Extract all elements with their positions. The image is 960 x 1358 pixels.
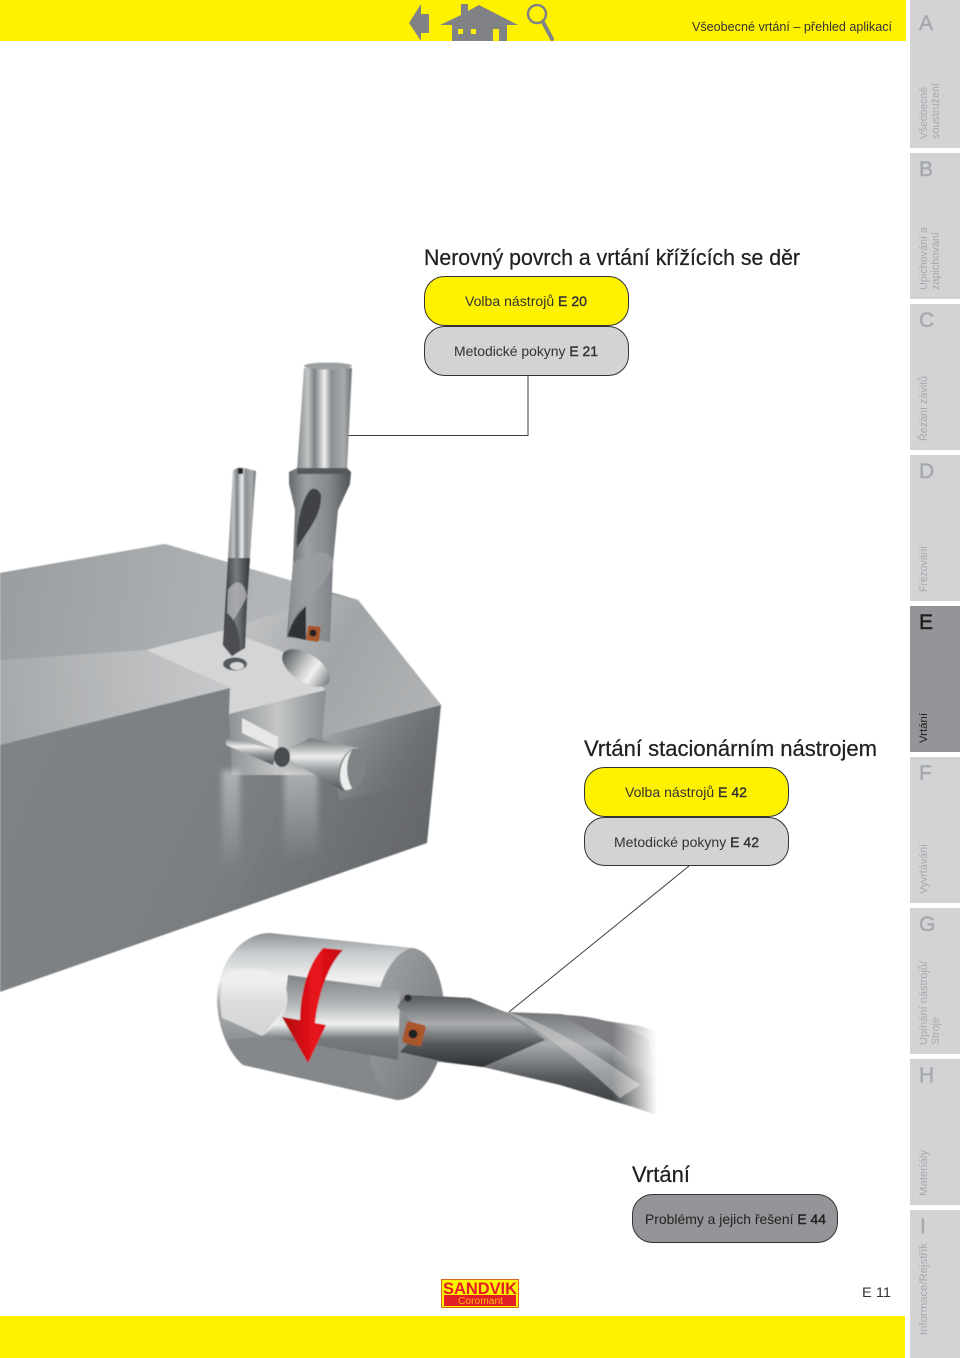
sidebar tabs: zapichování bbox=[930, 232, 942, 290]
cross tube opening bbox=[334, 745, 370, 795]
highlight on cylinder end bbox=[220, 968, 288, 1036]
logo: Sandvik Coromant bbox=[442, 1279, 518, 1308]
end face bbox=[370, 948, 445, 1100]
lighter wedge on top surface bbox=[0, 650, 230, 745]
sidebar tabs: H bbox=[919, 1064, 934, 1087]
section: drilling heading: Vrtání bbox=[632, 1162, 690, 1187]
sidebar tabs: soustružení bbox=[930, 83, 942, 139]
illustration: workpiece block with drills bbox=[0, 544, 441, 992]
sidebar tabs: C bbox=[919, 309, 934, 332]
sidebar tabs: F bbox=[919, 762, 932, 785]
sidebar tabs: D bbox=[919, 460, 934, 483]
insert bbox=[306, 625, 321, 642]
cross tube left part bbox=[226, 737, 277, 765]
sidebar tabs: A bbox=[919, 12, 933, 35]
tool shank bbox=[397, 994, 665, 1118]
lower body shade bbox=[226, 1036, 398, 1100]
connector line to tool bbox=[509, 866, 689, 1012]
button: guidelines E 21 bbox=[424, 326, 628, 376]
icon: red rotation arrow bbox=[282, 948, 343, 1063]
icon: back arrow bbox=[409, 4, 429, 41]
insert bbox=[402, 1021, 426, 1047]
sidebar tabs: Frézování bbox=[918, 546, 930, 592]
light band in pocket bbox=[242, 718, 278, 750]
icon: magnifier bbox=[528, 5, 552, 39]
drill: large indexable drill bbox=[287, 362, 352, 642]
cross tube right part bbox=[290, 738, 358, 791]
header title: Všeobecné vrtání – přehled aplikací bbox=[692, 19, 892, 34]
button: guidelines E 21: Metodické pokyny E 21 bbox=[454, 343, 598, 359]
sidebar tabs: Všeobecné bbox=[918, 87, 930, 139]
button: tool selection E 42: Volba nástrojů E 42 bbox=[625, 784, 747, 800]
button: troubleshooting E 44: Problémy a jejich řešení E 44 bbox=[645, 1211, 826, 1227]
sidebar tabs: Stroje bbox=[930, 1017, 942, 1045]
section: stationary tool heading: Vrtání stacionárním nástrojem bbox=[584, 736, 877, 761]
button: guidelines E 42 bbox=[584, 818, 788, 866]
sidebar tabs: Materiály bbox=[918, 1149, 930, 1196]
sidebar tabs: I bbox=[920, 1215, 926, 1238]
workpiece body bbox=[217, 933, 413, 1100]
right front highlight bbox=[322, 705, 441, 800]
section: uneven surface heading: Nerovný povrch a vrtání křížících se děr bbox=[424, 245, 800, 270]
drill: small solid drill bbox=[223, 467, 256, 656]
block base and front face bbox=[0, 544, 441, 992]
button: tool selection E 20 bbox=[424, 276, 628, 326]
machined surface right bbox=[225, 594, 441, 737]
button: tool selection E 20: Volba nástrojů E 20 bbox=[465, 293, 587, 309]
vertical hole streaks bbox=[222, 770, 240, 870]
button: tool selection E 42 bbox=[584, 768, 788, 816]
small opening bbox=[274, 747, 290, 767]
illustration: rotating workpiece with stationary tool bbox=[217, 933, 665, 1118]
page number: E 11 bbox=[862, 1284, 891, 1300]
sidebar tabs: G bbox=[919, 913, 935, 936]
button: guidelines E 42: Metodické pokyny E 42 bbox=[614, 834, 759, 850]
tool fade to white bbox=[612, 1010, 672, 1128]
button: troubleshooting E 44 bbox=[632, 1194, 838, 1242]
sidebar tabs: Vyvrtávání bbox=[918, 844, 930, 894]
footer bar bbox=[0, 1316, 905, 1358]
sidebar tabs: Upínání nástrojů/ bbox=[918, 960, 930, 1045]
smooth top surface bbox=[0, 544, 358, 745]
logo: Sandvik Coromant: SANDVIK bbox=[443, 1279, 518, 1298]
sidebar tabs: E bbox=[919, 611, 933, 634]
sidebar tabs bbox=[910, 0, 960, 1358]
sidebar tabs: Upichování a bbox=[918, 226, 930, 290]
logo: Sandvik Coromant: Coromant bbox=[458, 1296, 503, 1307]
sidebar tabs: Informace/Rejstřík bbox=[918, 1242, 930, 1335]
sidebar tabs: Vrtání bbox=[918, 713, 930, 743]
header bar bbox=[0, 0, 906, 41]
machined surface left bbox=[146, 630, 326, 714]
connector line to drill bbox=[348, 375, 528, 436]
pocket wall bbox=[229, 690, 326, 775]
bore bbox=[262, 975, 400, 1060]
sidebar tabs: Řezání závitů bbox=[917, 376, 930, 441]
large hole bbox=[276, 642, 336, 694]
small hole bbox=[223, 658, 247, 670]
icon: home bbox=[440, 4, 518, 41]
sidebar tabs: B bbox=[919, 158, 933, 181]
tool head bbox=[397, 995, 545, 1067]
